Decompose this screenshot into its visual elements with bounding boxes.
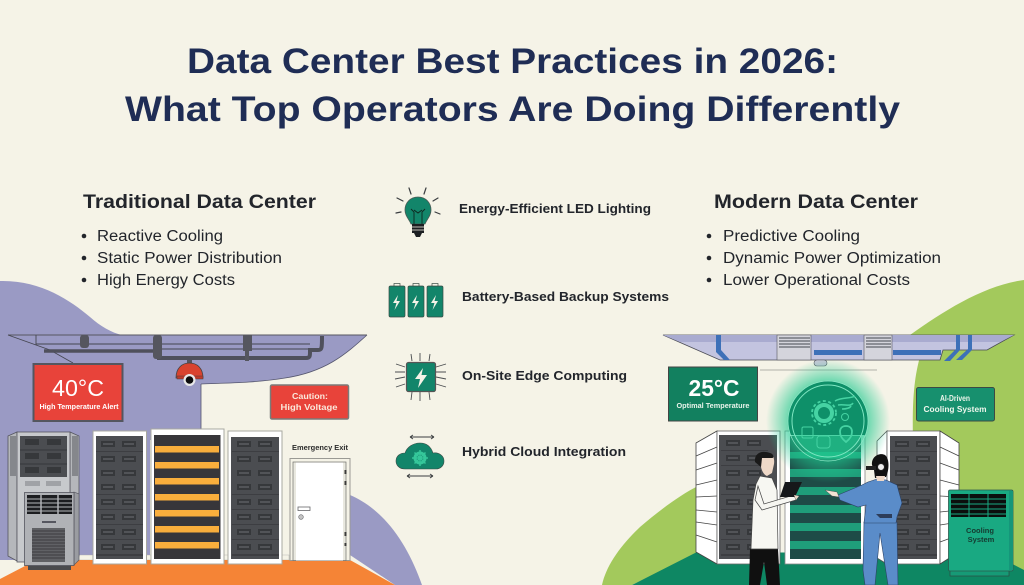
icon: security camera — [176, 360, 203, 386]
cooling system cabinet: System — [968, 535, 995, 544]
label: battery backup: Battery-Based Backup Systems — [462, 289, 669, 304]
label: hybrid cloud: Hybrid Cloud Integration — [462, 444, 626, 459]
modern bullet list: Dynamic Power Optimization — [723, 250, 941, 267]
title: What Top Operators Are Doing Differently — [125, 90, 901, 129]
wall edge line — [201, 335, 367, 430]
panel: modern data center text — [707, 192, 941, 289]
middle rack with amber bars — [151, 429, 224, 564]
green floor — [632, 552, 1024, 585]
icon: batteries — [389, 284, 443, 317]
sign: AI-driven cooling system: Cooling System — [924, 405, 986, 414]
panel: traditional data center illustration — [0, 281, 422, 585]
icon: hybrid cloud — [396, 435, 444, 478]
sign: optimal temperature: Optimal Temperature — [676, 403, 750, 410]
heading: traditional data center: Traditional Data Center — [83, 192, 317, 213]
left server rack — [93, 431, 146, 564]
panel: traditional data center text — [82, 192, 317, 289]
panel: central best practices list — [389, 188, 669, 478]
cooling system cabinet: Cooling — [966, 526, 994, 535]
sign: optimal temperature: 25°C — [688, 375, 740, 401]
left white server rack — [696, 431, 780, 564]
panel: modern data center illustration — [602, 280, 1024, 585]
purple lower wall — [0, 430, 422, 585]
person: scientist with tablet — [749, 452, 802, 585]
baseboard — [79, 555, 289, 560]
emergency exit door — [290, 443, 350, 560]
sign: caution high voltage: Caution: — [292, 391, 328, 401]
heading: modern data center: Modern Data Center — [714, 192, 919, 213]
icon: LED bulb — [396, 188, 440, 237]
traditional bullet list: Static Power Distribution — [97, 250, 282, 267]
sign: high temperature alert — [34, 364, 122, 421]
traditional bullet list — [82, 228, 282, 289]
modern bullet list — [707, 228, 941, 289]
label: LED lighting: Energy-Efficient LED Lighting — [459, 201, 651, 216]
ceiling and pipes — [8, 335, 367, 363]
central rack with green bars — [785, 431, 865, 564]
traditional bullet list: High Energy Costs — [97, 272, 235, 289]
green wall right — [910, 280, 1024, 570]
modern bullet list: Predictive Cooling — [723, 228, 860, 245]
green wall left — [602, 486, 698, 585]
person: engineer with blue suit — [825, 454, 902, 585]
modern bullet list: Lower Operational Costs — [723, 272, 910, 289]
right server rack — [228, 431, 282, 564]
cooling system cabinet — [948, 490, 1013, 576]
AI glowing orb — [766, 359, 890, 483]
sign: AI-driven cooling system — [916, 388, 994, 421]
purple wall — [0, 281, 367, 440]
title: Data Center Best Practices in 2026: — [187, 42, 838, 81]
ventilated ceiling with ducts — [663, 335, 1014, 370]
sign: high temperature alert: 40°C — [52, 375, 104, 401]
icon: edge chip — [395, 353, 446, 401]
sign: caution high voltage — [270, 385, 348, 419]
right white server rack — [877, 431, 959, 564]
sign: high temperature alert: High Temperature Alert — [40, 404, 119, 411]
grey server cabinet — [8, 432, 79, 562]
sign: optimal temperature — [668, 367, 758, 421]
sign: caution high voltage: High Voltage — [280, 402, 338, 412]
orange floor — [0, 560, 395, 585]
sign: AI-driven cooling system: AI-Driven — [940, 394, 970, 403]
title — [125, 42, 901, 129]
air conditioning unit — [24, 492, 79, 570]
emergency exit door: Emergency Exit — [292, 443, 348, 452]
traditional bullet list: Reactive Cooling — [97, 228, 223, 245]
label: edge computing: On-Site Edge Computing — [462, 368, 627, 383]
